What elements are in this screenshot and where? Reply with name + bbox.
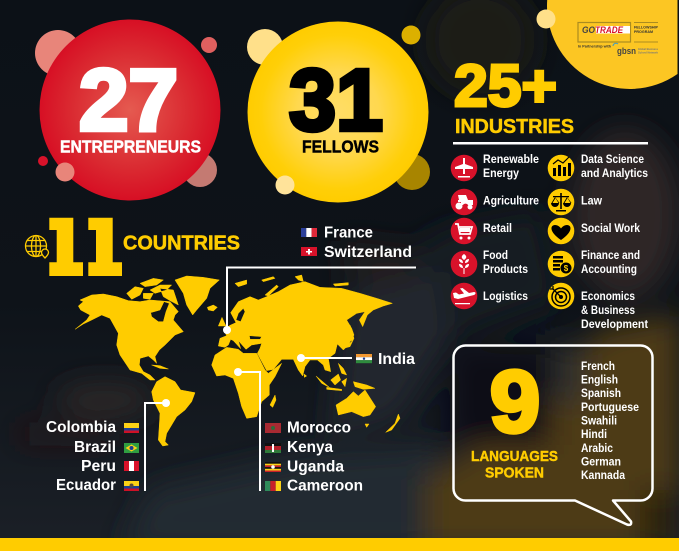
logo badge: In Partnership with xyxy=(578,44,612,48)
industry: logistics: Logistics xyxy=(483,291,528,303)
logo badge: Global Business xyxy=(638,47,658,51)
industry: data science and analytics: and Analytics xyxy=(581,168,648,180)
connector: India xyxy=(297,354,352,362)
connector: Africa xyxy=(234,368,260,491)
logo badge: School Network xyxy=(638,50,658,54)
stat: 9 languages spoken xyxy=(471,354,558,482)
language list: English xyxy=(581,375,618,387)
industry: finance and accounting xyxy=(548,250,640,277)
industry: law xyxy=(548,189,602,215)
stat: 25+ industries xyxy=(453,53,648,144)
industry: renewable energy xyxy=(451,154,539,181)
industry: data science and analytics xyxy=(548,154,648,181)
stat: 25+ industries: 25+ xyxy=(454,53,557,119)
industries list xyxy=(451,154,648,331)
label: Switzerland: Switzerland xyxy=(324,244,412,261)
industry: renewable energy: Renewable xyxy=(483,154,539,166)
industry: data science and analytics: Data Science xyxy=(581,154,644,166)
bottom bar xyxy=(0,538,679,551)
language list: Portuguese xyxy=(581,402,639,414)
industry: law: Law xyxy=(581,196,602,208)
heading: 11 countries xyxy=(49,218,240,285)
label: Morocco: Morocco xyxy=(287,420,351,437)
industry: economics and business development: Development xyxy=(581,319,648,331)
logo badge: GO xyxy=(582,25,595,35)
label: France xyxy=(301,224,373,242)
language list: German xyxy=(581,457,621,469)
language list: French xyxy=(581,361,615,373)
icon: globe with pin xyxy=(26,236,48,258)
industry: agriculture: Agriculture xyxy=(483,196,539,208)
connector: France and Switzerland xyxy=(223,268,416,334)
stat: 9 languages spoken: SPOKEN xyxy=(485,466,544,482)
stat: 9 languages spoken: 9 xyxy=(490,354,540,450)
label: Colombia: Colombia xyxy=(46,419,116,436)
industry: finance and accounting: Accounting xyxy=(581,264,637,276)
industry: logistics xyxy=(451,283,528,309)
stat: 31 fellows: 31 xyxy=(289,52,383,149)
language list: Kannada xyxy=(581,470,626,482)
label: Kenya: Kenya xyxy=(287,439,333,456)
label: France: France xyxy=(324,224,373,242)
industry: renewable energy: Energy xyxy=(483,168,520,180)
stat: 25+ industries: INDUSTRIES xyxy=(455,116,574,138)
label: Peru xyxy=(81,458,139,475)
logo badge xyxy=(536,0,678,89)
stat: 27 entrepreneurs xyxy=(35,20,220,200)
industry: food products: Food xyxy=(483,250,508,262)
heading: 11 countries: 11 xyxy=(56,251,114,285)
stat: 9 languages spoken: LANGUAGES xyxy=(471,449,558,465)
industry: social work xyxy=(548,218,641,244)
map: Americas and Greenland xyxy=(75,276,219,446)
industry: retail: Retail xyxy=(483,223,512,235)
language list: Hindi xyxy=(581,429,607,441)
label: Peru: Peru xyxy=(81,458,116,475)
map: Europe, Africa, Asia and Oceania xyxy=(212,275,400,432)
logo badge: TRADE xyxy=(595,25,624,35)
industry: retail xyxy=(451,218,512,244)
industry: agriculture xyxy=(451,189,539,215)
logo badge: FELLOWSHIP xyxy=(634,26,658,30)
label: Brazil: Brazil xyxy=(74,439,116,456)
industry: finance and accounting: Finance and xyxy=(581,250,640,262)
stat: 31 fellows xyxy=(247,22,430,202)
label: India xyxy=(356,351,415,368)
industry: social work: Social Work xyxy=(581,223,641,235)
label: Cameroon: Cameroon xyxy=(287,478,363,495)
industry: economics and business development xyxy=(548,283,648,331)
connector: South America xyxy=(145,399,170,491)
language list: Swahili xyxy=(581,416,617,428)
stat: 27 entrepreneurs: ENTREPRENEURS xyxy=(60,136,201,156)
logo badge: gbsn xyxy=(617,46,636,56)
industry: food products xyxy=(451,250,528,277)
label: Ecuador: Ecuador xyxy=(56,477,116,494)
stat: 27 entrepreneurs: 27 xyxy=(79,52,178,149)
industry: finance and accounting: $ xyxy=(564,264,569,273)
stat: 31 fellows: FELLOWS xyxy=(302,136,379,156)
label: India: India xyxy=(378,351,415,368)
label: Uganda: Uganda xyxy=(287,459,344,476)
world map xyxy=(75,275,400,446)
industry: food products: Products xyxy=(483,264,528,276)
heading: 11 countries: COUNTRIES xyxy=(123,232,240,254)
speech bubble: languages xyxy=(454,346,652,525)
logo badge: PROGRAM xyxy=(634,30,653,34)
industry: economics and business development: & Business xyxy=(581,305,635,317)
industry: economics and business development: Economics xyxy=(581,291,635,303)
language list xyxy=(581,361,639,482)
language list: Spanish xyxy=(581,388,621,400)
label: Kenya xyxy=(265,439,333,456)
language list: Arabic xyxy=(581,443,614,455)
label: Brazil xyxy=(74,439,139,456)
